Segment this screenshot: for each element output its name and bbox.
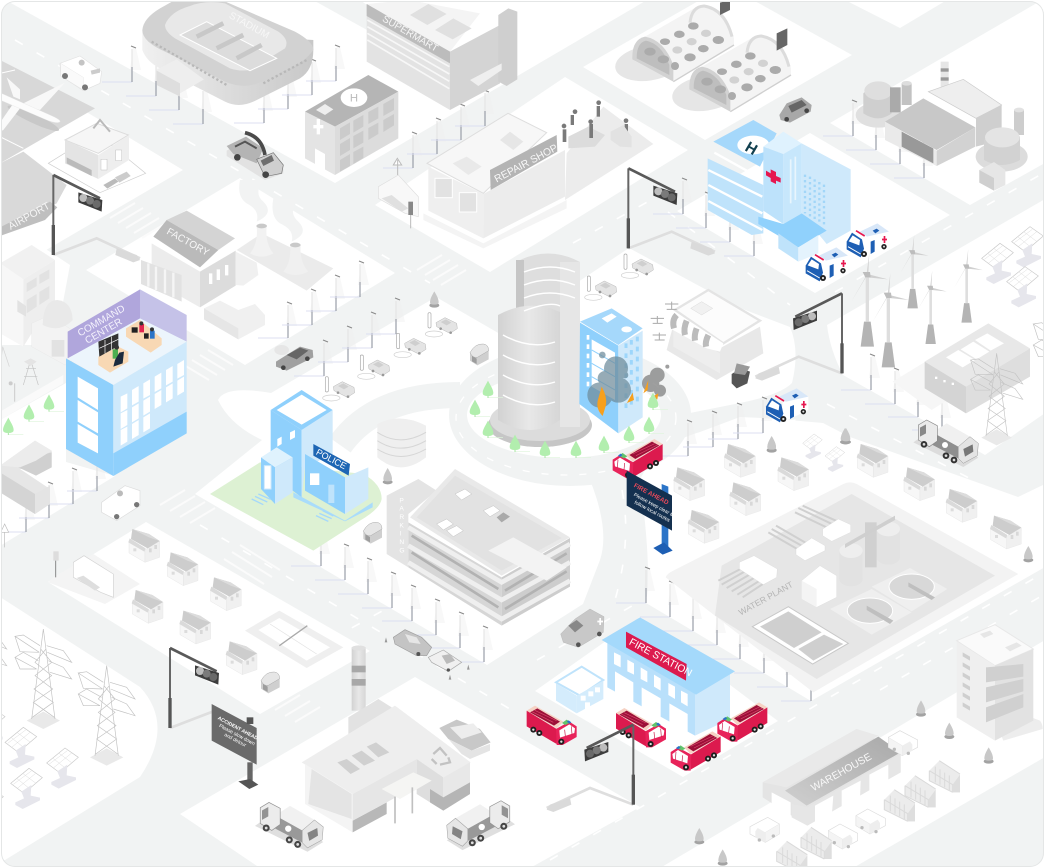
icon: recycle [432,748,450,765]
wind turbines [851,235,983,367]
label: helipad H: H [742,139,760,159]
gray trees by road [767,428,851,453]
label: repair shop: REPAIR SHOP [493,143,560,185]
water plant [666,482,1018,692]
ambulance on road [766,388,808,422]
traffic light: hospital junction [628,168,715,256]
recycling truck on road [913,420,978,467]
trees around roundabout and fence [3,381,668,458]
small airport building with parking [48,120,146,193]
airport runway and plane [0,60,95,163]
houses: east block [673,444,1021,549]
solar panels [0,707,78,828]
grey car with open hood [274,345,313,371]
recycling centre [302,699,491,832]
small hospital: H [350,93,358,105]
convenience shop [651,290,763,380]
label: warehouse: WAREHOUSE [809,752,874,794]
industrial plant [856,62,1028,191]
label: airport: AIRPORT [7,201,53,233]
billboard: accident ahead [212,704,259,789]
white service van [60,56,102,91]
left office building and dome [0,245,77,365]
houses: left block [128,529,257,675]
left pad: water tower and fence [0,347,63,420]
greenhouse one [613,5,734,85]
label: water plant: WATER PLANT [737,579,795,617]
cooling towers with smoke [237,180,333,291]
label: police: POLICE [314,447,348,471]
burning building [579,308,669,433]
stadium [142,0,313,105]
traffic light: wind farm junction [755,293,842,381]
greenhouse two [670,35,791,115]
label: parking vertical: K [399,522,404,529]
main tower [488,254,592,447]
ribbed tower block [377,419,426,467]
crosswalks [110,203,466,722]
electric pylons [0,616,135,766]
label: parking vertical: P [399,497,404,504]
street lamps [0,45,951,701]
trash container [732,363,750,388]
greenhouse signs [720,0,787,51]
roundabout [340,344,691,486]
label: stadium: STADIUM [227,10,271,41]
white van near command center [102,486,140,521]
billboard: fire ahead [627,471,675,555]
EV chargers [585,254,653,300]
label: command center: COMMAND [76,303,127,339]
supermart [367,0,517,110]
label: parking vertical: R [399,514,404,521]
crane truck [227,133,283,180]
label: parking vertical: N [399,539,404,546]
grey van on road [561,609,604,647]
billboard: accident ahead: Please slow down [218,723,256,747]
label: parking vertical: G [399,547,405,554]
traffic light: west [170,648,257,735]
small grey trees [694,428,1033,866]
command center [0,289,187,476]
label: supermart: SUPERMART [380,14,440,55]
airport terminal roof [0,152,67,236]
electric pylon at factory [971,353,1023,445]
label: fire station: FIRE STATION [627,637,694,679]
warehouse [763,729,901,826]
bin [261,672,280,693]
billboard: accident ahead: and detour [223,732,247,749]
police station [210,390,382,551]
label: parking vertical: A [399,506,404,513]
delivery trucks [750,731,918,849]
garbage trucks [255,801,515,852]
bus shelter and sign [1,524,140,604]
blue hospital [708,120,851,262]
small hospital [305,75,398,175]
chimney [352,645,366,711]
label: factory: FACTORY [165,226,211,259]
partial pylon at right edge [1033,317,1045,417]
traffic light: fire station junction [547,725,633,812]
crash scene [385,630,470,680]
tall office building [957,625,1043,741]
U-shaped building [0,441,52,514]
factory [141,211,265,339]
repair shop yard and workers [562,100,653,200]
tennis court [245,611,343,668]
ambulances at hospital [806,223,889,281]
fire station [556,617,735,736]
repair shop [423,113,567,248]
billboard: accident ahead: ACCIDENT AHEAD [216,715,259,742]
billboard: fire ahead: Please keep clear & [632,492,675,519]
solar panels [982,227,1043,307]
billboard: fire ahead: follow local routes [633,500,671,524]
bus shelter [378,158,418,228]
billboard: fire ahead: FIRE AHEAD [632,482,670,507]
self-driving grey car [779,97,812,123]
control desks and operators [98,320,162,373]
label: parking vertical: I [399,531,401,538]
solar panels near houses [803,434,845,472]
icon: red cross [766,169,781,184]
fire trucks at station [527,702,767,771]
EV chargers and small bins [323,291,489,401]
fire truck on roundabout [613,439,663,478]
traffic light: airport junction [53,175,140,262]
warehouse right of turbines with skylights [893,323,1030,413]
stacked crates [777,761,960,868]
label: command center: CENTER [83,317,124,347]
drones [651,302,678,340]
parking garage [387,469,570,626]
